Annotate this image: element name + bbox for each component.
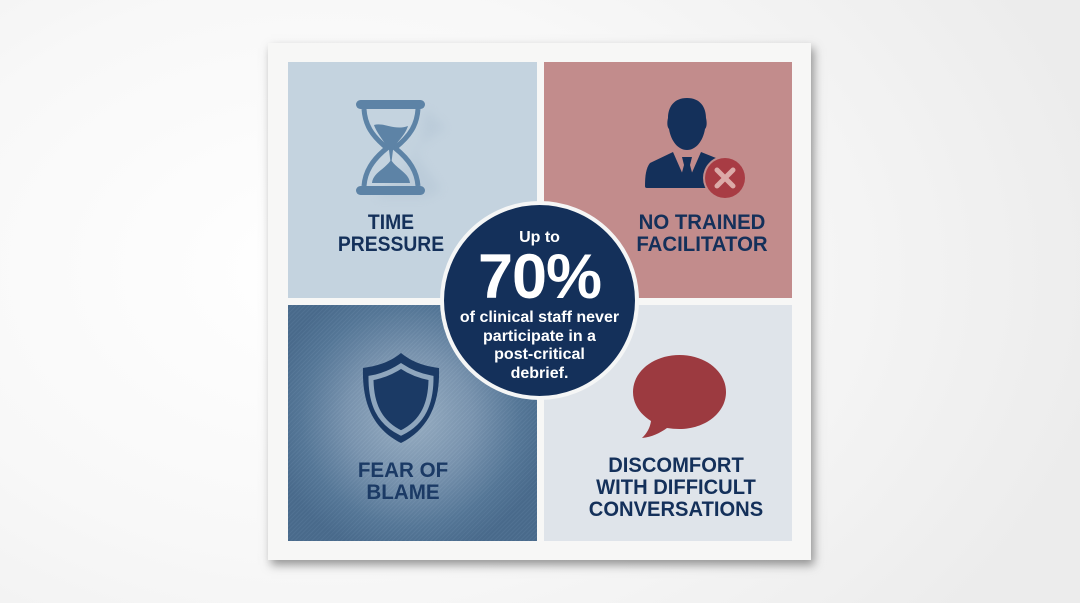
heading: fear of blame: FEAR OF <box>358 459 448 482</box>
icon: person with cross <box>645 98 745 198</box>
heading: time pressure <box>338 211 444 256</box>
heading: discomfort with difficult conversations: WITH DIFFICULT <box>596 476 756 499</box>
stat: 70%: 70% <box>478 242 601 312</box>
panel: time pressure <box>288 62 537 298</box>
heading: discomfort with difficult conversations: DISCOMFORT <box>608 454 744 477</box>
heading: time pressure: PRESSURE <box>338 233 444 256</box>
heading: fear of blame: BLAME <box>366 481 440 504</box>
infographic card <box>268 43 811 560</box>
icon: shield <box>362 353 440 443</box>
heading: no trained facilitator: NO TRAINED <box>639 211 765 234</box>
icon: speech bubble <box>633 355 726 438</box>
heading: no trained facilitator <box>636 211 768 256</box>
panel: fear of blame <box>288 305 537 541</box>
text: description: of clinical staff never <box>460 309 619 326</box>
text: description: post-critical <box>494 346 585 363</box>
heading: discomfort with difficult conversations <box>589 454 763 521</box>
heading: discomfort with difficult conversations: CONVERSATIONS <box>589 498 763 521</box>
heading: no trained facilitator: FACILITATOR <box>636 233 768 256</box>
text: description: debrief. <box>511 365 568 382</box>
panel: discomfort with difficult conversations <box>544 305 792 541</box>
heading: time pressure: TIME <box>368 211 414 234</box>
callout: 70% statistic <box>440 201 639 400</box>
icon: hourglass <box>356 100 425 195</box>
text: description: participate in a <box>483 328 596 345</box>
text: description <box>460 309 619 382</box>
panel: no trained facilitator <box>544 62 792 298</box>
heading: fear of blame <box>358 459 448 504</box>
text: up to: Up to <box>519 229 560 246</box>
